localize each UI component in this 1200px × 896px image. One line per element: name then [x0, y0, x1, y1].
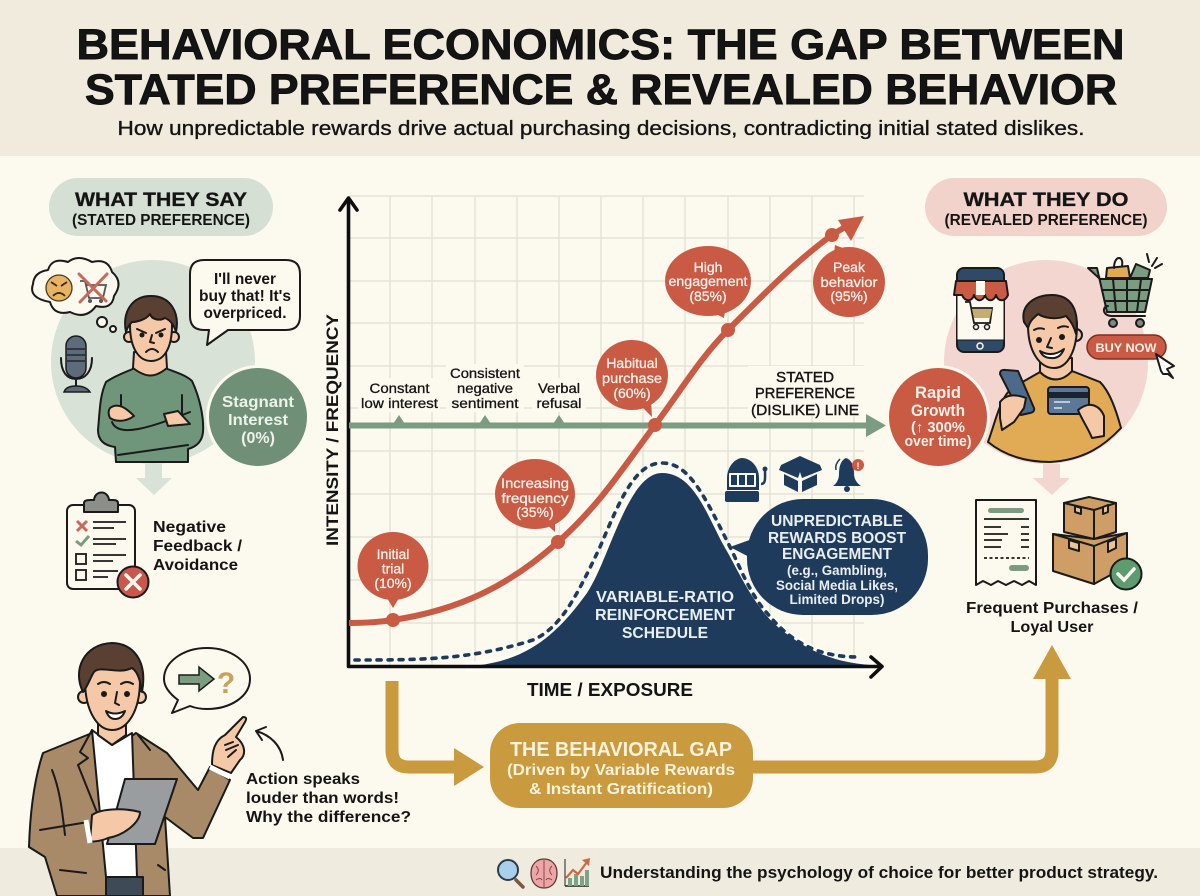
bubble: habitual purchase — [596, 340, 668, 417]
panel: what they do — [888, 178, 1174, 636]
callout: unpredictable rewards: ENGAGEMENT — [782, 546, 893, 563]
heading pill: what they do: WHAT THEY DO — [964, 189, 1128, 211]
label: constant low interest: low interest — [361, 396, 438, 411]
stagnant interest badge: Stagnant — [222, 394, 295, 411]
label: consistent negative sentiment: negative — [457, 381, 513, 396]
axes — [340, 198, 882, 677]
presenter left hand — [90, 809, 140, 842]
label: stated preference dislike line: PREFERENCE — [755, 385, 855, 402]
arrow: into gap — [392, 681, 484, 786]
icon: red x badge — [118, 566, 148, 598]
bell label — [595, 589, 735, 642]
text: action speaks louder: louder than words! — [246, 790, 399, 807]
icon: cursor — [1156, 354, 1174, 378]
presenter cuff — [86, 820, 90, 843]
speech bubble: arrow and question — [164, 648, 250, 713]
speech bubble: never buy: buy that! It's — [199, 288, 291, 305]
text: frequent purchases — [966, 600, 1139, 636]
person with crossed arms — [98, 296, 203, 462]
presenter with tablet — [29, 643, 411, 896]
text: negative feedback — [153, 519, 243, 574]
text: frequent purchases: Frequent Purchases / — [966, 600, 1139, 617]
button: buy now — [1087, 335, 1166, 359]
rapid growth badge: (↑ 300% — [911, 420, 965, 436]
footer band — [0, 848, 1200, 896]
behavioral gap box: (Driven by Variable Rewards — [507, 762, 735, 779]
icon: receipt — [976, 500, 1036, 585]
label: stated preference dislike line: (DISLIKE) LINE — [751, 402, 859, 419]
icon: slot machine — [725, 458, 768, 502]
icon: credit card — [1048, 387, 1089, 414]
icon: shopping cart — [1088, 254, 1162, 327]
callout: unpredictable rewards: REWARDS BOOST — [768, 530, 907, 547]
behavioral gap box: THE BEHAVIORAL GAP — [510, 739, 732, 761]
heading pill: what they do — [925, 178, 1167, 236]
bubble: initial trial: Initial — [377, 546, 409, 562]
callout: unpredictable rewards: Social Media Likes, — [776, 578, 898, 593]
bubble: increasing frequency: frequency — [502, 490, 568, 506]
header band — [0, 0, 1200, 156]
bubble: peak behavior: (95%) — [830, 288, 868, 304]
bubble: high engagement: (85%) — [689, 288, 727, 304]
callout: unpredictable rewards: UNPREDICTABLE — [771, 513, 903, 530]
bubble: initial trial — [358, 532, 428, 608]
icon: crossed cart — [79, 274, 107, 303]
label: constant low interest — [358, 378, 440, 412]
icon: angry face — [46, 275, 72, 301]
revealed behavior curve — [349, 216, 864, 627]
label: verbal refusal: refusal — [536, 396, 582, 411]
presenter pointing hand — [210, 717, 246, 777]
label: verbal refusal: Verbal — [538, 381, 580, 396]
icon: brain — [531, 859, 557, 888]
person shopping — [988, 295, 1121, 462]
left hand on card — [1078, 405, 1104, 438]
panel: behavioral gap flow — [392, 645, 1071, 808]
icon: stacked boxes — [1053, 497, 1142, 590]
bubble: peak behavior: behavior — [820, 274, 878, 290]
presenter trousers — [106, 877, 143, 896]
behavioral gap box: & Instant Gratification) — [529, 781, 713, 798]
background circle — [944, 260, 1148, 464]
label: stated preference dislike line: STATED — [776, 369, 834, 386]
text: action speaks louder: Action speaks — [246, 771, 360, 788]
x axis label: TIME / EXPOSURE — [527, 680, 693, 700]
icon: thought bubble — [32, 258, 119, 332]
bubble: habitual purchase: (60%) — [613, 385, 651, 401]
text: action speaks louder: Why the difference? — [246, 809, 411, 826]
heading pill: what they say — [49, 178, 273, 236]
subtitle: How unpredictable rewards drive actual purchasing decisions, contradicting initial stated dislikes. — [118, 118, 1084, 140]
bubble: peak behavior: Peak — [833, 259, 866, 275]
title — [76, 21, 1124, 114]
right hand on phone — [1000, 395, 1026, 430]
bubble: high engagement — [665, 246, 751, 318]
footer text: Understanding the psychology of choice for better product strategy. — [600, 864, 1158, 882]
icon: handheld phone — [1000, 370, 1034, 415]
icon: notification bell — [833, 458, 864, 492]
title: BEHAVIORAL ECONOMICS: THE GAP BETWEEN — [76, 21, 1124, 69]
stagnant interest badge: Interest — [228, 412, 289, 429]
label: verbal refusal — [532, 378, 586, 412]
bubble: increasing frequency: Increasing — [501, 475, 569, 491]
speech bubble: arrow and question: ? — [217, 667, 235, 700]
stagnant interest badge — [208, 366, 308, 468]
variable-ratio bell curve — [355, 463, 870, 667]
label: stated preference dislike line — [748, 366, 864, 419]
bell label: SCHEDULE — [622, 625, 708, 642]
icon: growth chart — [565, 858, 590, 886]
text: action speaks louder — [246, 771, 411, 826]
icon: microphone — [61, 336, 92, 392]
label: consistent negative sentiment: sentiment — [452, 396, 519, 411]
arrow: down to frequent purchases — [1033, 464, 1070, 495]
label: constant low interest: Constant — [370, 381, 430, 396]
presenter lapels and seams — [40, 730, 165, 873]
presenter head — [78, 643, 146, 730]
bell label: VARIABLE-RATIO — [596, 589, 734, 606]
speech bubble: never buy — [190, 260, 300, 345]
text: frequent purchases: Loyal User — [1010, 619, 1094, 636]
y axis label: INTENSITY / FREQUENCY — [323, 313, 342, 546]
stagnant interest badge: (0%) — [241, 430, 275, 447]
text: negative feedback: Negative — [153, 519, 226, 536]
rapid growth badge: Rapid — [915, 383, 961, 402]
panel: chart — [323, 196, 928, 700]
icon: clipboard — [67, 492, 148, 598]
bubble: initial trial: (10%) — [374, 575, 412, 591]
callout: unpredictable rewards — [730, 499, 928, 615]
icon: magnifier — [498, 860, 523, 887]
bubble: habitual purchase: Habitual — [606, 355, 658, 371]
background circle — [51, 260, 255, 464]
bubble: increasing frequency: (35%) — [516, 504, 554, 520]
rapid growth badge: Growth — [911, 401, 965, 420]
presenter neck — [98, 722, 126, 745]
label: consistent negative sentiment — [446, 364, 524, 412]
heading pill: what they say: WHAT THEY SAY — [75, 189, 247, 211]
icon: notification bell: ! — [856, 461, 860, 471]
tablet — [107, 779, 177, 844]
bubble: peak behavior — [813, 245, 885, 317]
icon: open box — [779, 456, 822, 492]
speech bubble: never buy: I'll never — [214, 271, 276, 288]
bubble: high engagement: engagement — [668, 273, 748, 289]
text: negative feedback: Avoidance — [153, 557, 238, 574]
label: consistent negative sentiment: Consistent — [450, 366, 520, 381]
icon: shop phone — [954, 268, 1008, 352]
heading pill: what they do: (REVEALED PREFERENCE) — [944, 212, 1148, 229]
behavioral gap box — [490, 723, 753, 808]
icon: check badge — [1110, 558, 1142, 590]
callout: unpredictable rewards: Limited Drops) — [790, 592, 884, 607]
bubble: habitual purchase: purchase — [602, 370, 662, 386]
button: buy now: BUY NOW — [1096, 341, 1157, 355]
bell label: REINFORCEMENT — [595, 607, 735, 624]
chart grid — [349, 196, 864, 665]
text: negative feedback: Feedback / — [153, 538, 243, 555]
presenter jacket — [29, 733, 230, 896]
arrow: down to negative feedback — [136, 464, 172, 495]
callout: unpredictable rewards: (e.g., Gambling, — [787, 563, 887, 578]
bubble: high engagement: High — [694, 259, 722, 275]
stated preference line — [349, 414, 886, 437]
bubble: initial trial: trial — [382, 560, 404, 576]
rapid growth badge: over time) — [904, 434, 972, 450]
arrow: curved to hand — [256, 727, 283, 760]
arrow: gap to frequent purchases — [750, 645, 1071, 767]
presenter shirt — [92, 730, 137, 877]
title: STATED PREFERENCE & REVEALED BEHAVIOR — [85, 66, 1117, 114]
speech bubble: never buy: overpriced. — [204, 305, 286, 322]
bubble: increasing frequency — [495, 459, 575, 532]
rapid growth badge — [888, 366, 988, 468]
heading pill: what they say: (STATED PREFERENCE) — [72, 212, 250, 229]
panel: what they say — [32, 178, 309, 598]
